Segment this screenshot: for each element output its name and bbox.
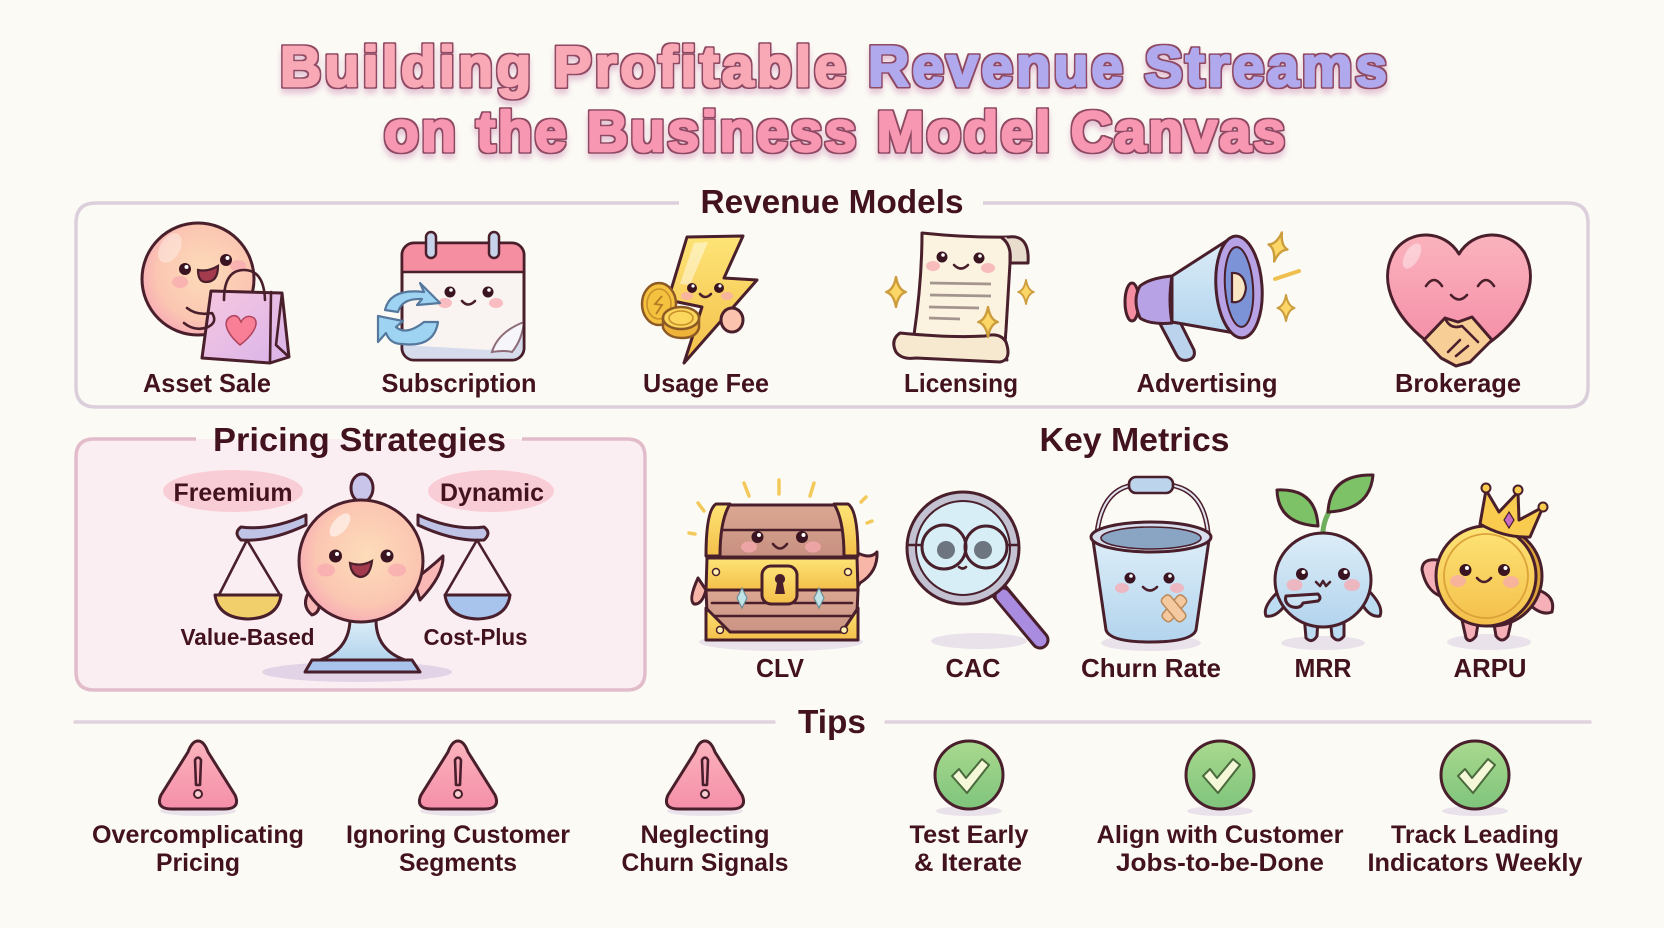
icon: clv treasure chest xyxy=(689,480,877,651)
icon: warning triangle 1 xyxy=(159,741,237,816)
tip text: neglecting churn signals: Churn Signals xyxy=(622,849,788,877)
label: cost-plus: Cost-Plus xyxy=(424,624,528,650)
tip text: neglecting churn signals: Neglecting xyxy=(640,821,770,849)
icon: churn rate bucket xyxy=(1091,477,1211,651)
tip text: align with customer jobs-to-be-done: Jobs-to-be-Done xyxy=(1116,849,1324,877)
tip text: track leading indicators weekly: Track Leading xyxy=(1391,821,1559,849)
tip text: ignoring customer segments: Segments xyxy=(399,849,517,877)
pill: freemium xyxy=(163,470,303,512)
icon: warning triangle 2 xyxy=(419,741,497,816)
tip text: align with customer jobs-to-be-done xyxy=(1096,821,1344,877)
tip text: test early and iterate: & Iterate xyxy=(914,849,1022,877)
tip text: test early and iterate xyxy=(910,821,1029,877)
icon: check circle 1 xyxy=(935,741,1003,816)
icon: check circle 3 xyxy=(1441,741,1509,816)
label: cac: CAC xyxy=(946,653,1001,683)
icon: warning triangle 3 xyxy=(666,741,744,816)
panel: revenue models xyxy=(76,183,1588,407)
label: value-based: Value-Based xyxy=(180,624,314,650)
label: asset sale: Asset Sale xyxy=(143,368,271,398)
panel outline: revenue models xyxy=(76,203,1588,407)
panel background: pricing xyxy=(76,439,645,690)
tip text: ignoring customer segments: Ignoring Customer xyxy=(346,821,570,849)
tip text: neglecting churn signals xyxy=(622,821,788,877)
icon: cac magnifying glass xyxy=(907,492,1040,649)
pill: dynamic: Dynamic xyxy=(440,479,544,507)
tip text: track leading indicators weekly xyxy=(1368,821,1583,877)
icon: asset sale ball with bag xyxy=(142,223,289,363)
icon: brokerage heart xyxy=(1388,235,1530,366)
tip text: overcomplicating pricing xyxy=(92,821,304,877)
tip text: align with customer jobs-to-be-done: Align with Customer xyxy=(1096,821,1344,849)
icon: subscription calendar xyxy=(378,232,524,360)
label: advertising: Advertising xyxy=(1136,368,1278,398)
label: churn rate: Churn Rate xyxy=(1081,653,1221,683)
tip text: overcomplicating pricing: Overcomplicating xyxy=(92,821,304,849)
label: arpu: ARPU xyxy=(1454,653,1526,683)
icon: usage fee bolt xyxy=(642,236,757,363)
icon: scale character xyxy=(215,474,510,682)
icon: advertising megaphone xyxy=(1125,230,1299,360)
section: tips xyxy=(75,703,1590,877)
title: Building Profitable xyxy=(280,35,846,99)
pill: dynamic xyxy=(428,470,554,512)
label: clv: CLV xyxy=(756,653,805,683)
icon: check circle 2 xyxy=(1186,741,1254,816)
pill: freemium: Freemium xyxy=(174,479,292,507)
panel: pricing strategies xyxy=(76,421,645,690)
label: brokerage: Brokerage xyxy=(1395,368,1521,398)
tip text: ignoring customer segments xyxy=(346,821,570,877)
icon: licensing scroll xyxy=(886,233,1034,362)
icon: arpu coin with crown xyxy=(1422,484,1553,650)
icon: mrr sprout xyxy=(1265,475,1381,650)
tip text: track leading indicators weekly: Indicators Weekly xyxy=(1368,849,1583,877)
label: mrr: MRR xyxy=(1294,653,1352,683)
tip text: overcomplicating pricing: Pricing xyxy=(156,849,240,877)
title xyxy=(280,35,1387,164)
label: licensing: Licensing xyxy=(904,368,1018,398)
heading: pricing strategies: Pricing Strategies xyxy=(213,421,506,458)
heading: tips: Tips xyxy=(798,703,866,740)
panel outline: pricing xyxy=(76,439,645,690)
heading: key metrics: Key Metrics xyxy=(1040,421,1230,458)
tip text: test early and iterate: Test Early xyxy=(910,821,1029,849)
heading: revenue models: Revenue Models xyxy=(700,183,964,220)
panel: key metrics xyxy=(689,421,1553,683)
label: usage fee: Usage Fee xyxy=(643,368,769,398)
title: on the Business Model Canvas xyxy=(384,100,1285,164)
label: subscription: Subscription xyxy=(382,368,536,398)
title: Revenue Streams xyxy=(868,35,1387,99)
